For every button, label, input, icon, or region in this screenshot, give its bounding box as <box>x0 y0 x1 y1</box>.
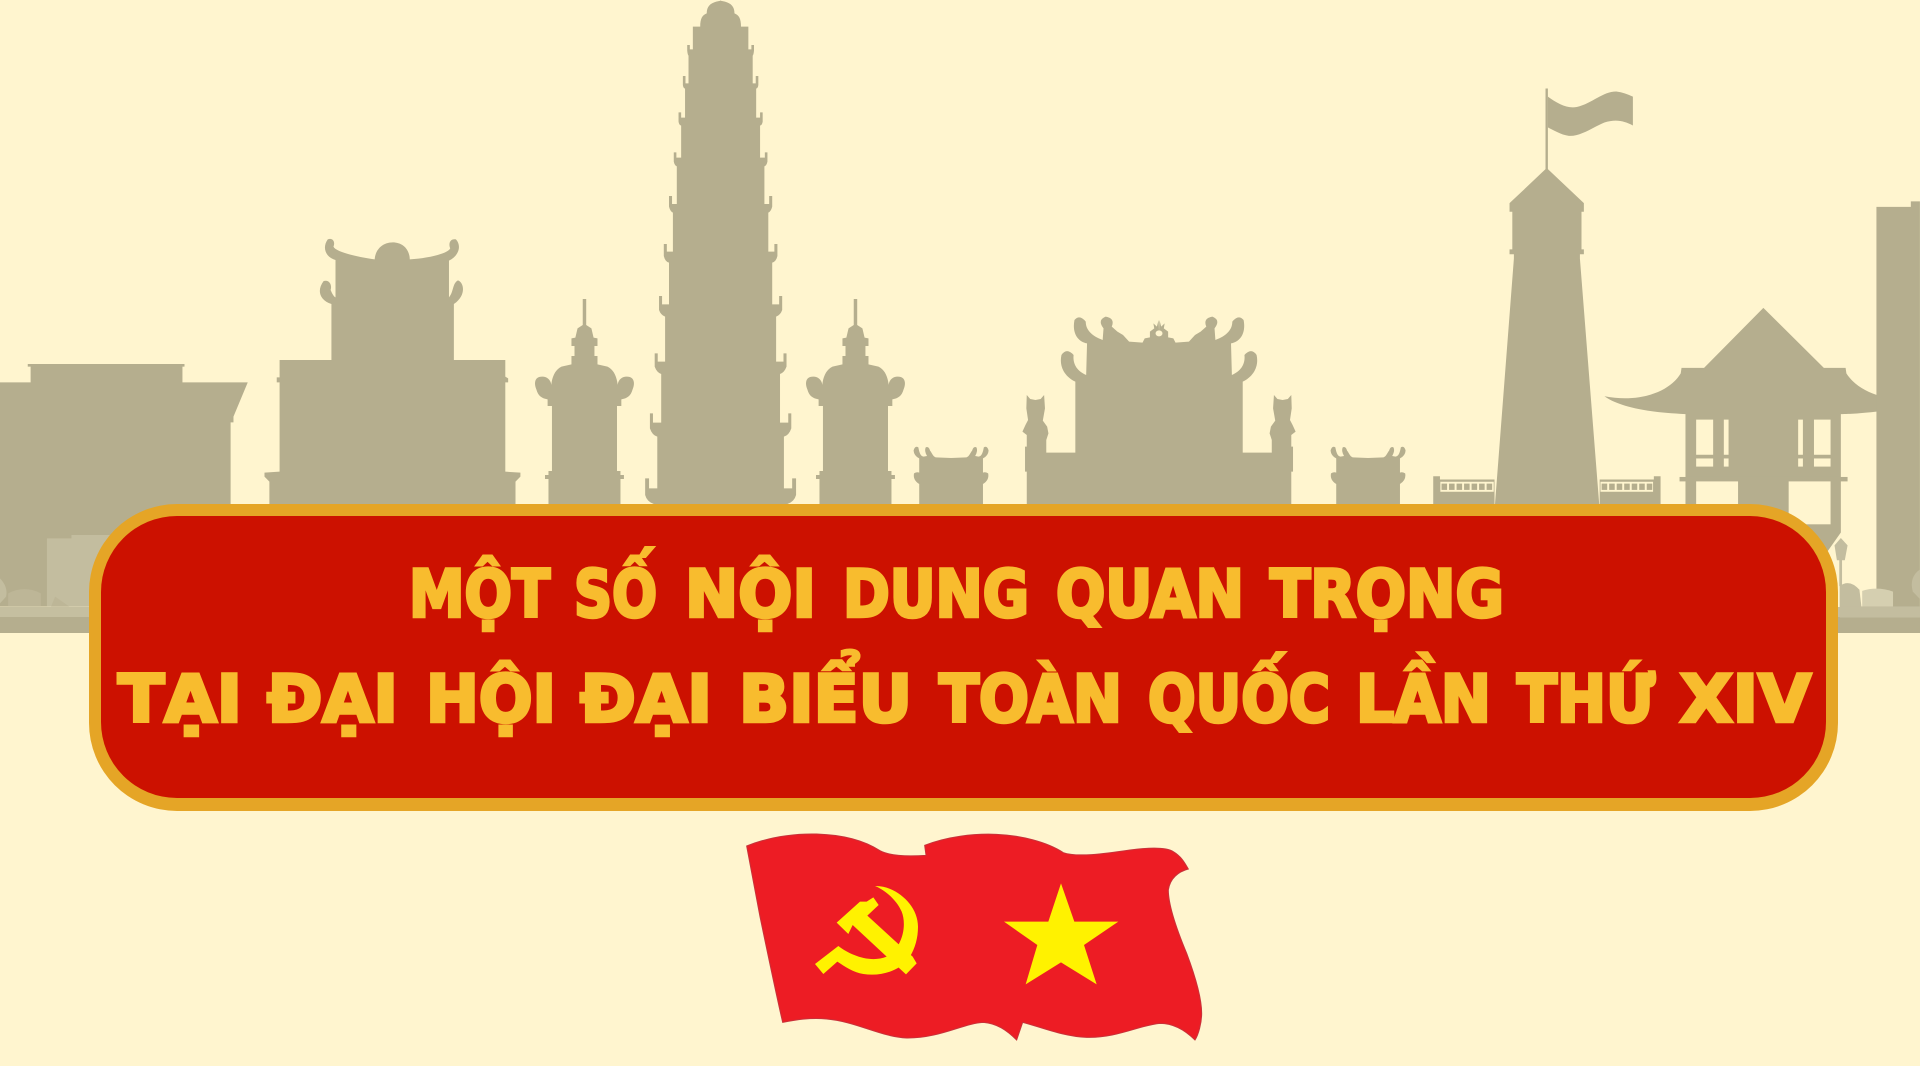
ground strip <box>0 607 1920 633</box>
title line 2: THỨ <box>1517 660 1656 738</box>
building: temple gate <box>264 239 520 510</box>
title line 1: SỐ <box>574 546 657 632</box>
title line 2: ĐẠI <box>267 662 398 738</box>
building: pavilion <box>1604 308 1881 551</box>
title line 2: XIV <box>1680 662 1811 738</box>
title line 1: NỘI <box>685 554 816 632</box>
title line 1: QUAN <box>1056 558 1244 632</box>
building: left office block <box>0 364 248 607</box>
tower: flag tower with balustrades <box>1433 88 1661 510</box>
title line 2: TOÀN <box>939 660 1122 738</box>
title line 1: TRỌNG <box>1270 558 1504 632</box>
icon: waving flag <box>747 834 1202 1040</box>
building: small shrine two <box>1331 447 1406 508</box>
building: right tall block <box>1876 201 1920 610</box>
title line 1 <box>409 546 1504 632</box>
title line 2: LẦN <box>1356 652 1491 738</box>
tower: left stupa <box>535 299 634 508</box>
title line 2: QUỐC <box>1148 652 1330 738</box>
title line 2: ĐẠI <box>580 662 712 738</box>
tower: right stupa <box>806 299 905 508</box>
street details: lamp, tree and car <box>1835 538 1920 618</box>
icon: yellow star <box>1004 883 1118 984</box>
title line 1: DUNG <box>843 558 1029 632</box>
title line 2: TẠI <box>118 662 242 738</box>
building: small shrine one <box>914 447 989 508</box>
building: central temple <box>1022 317 1296 508</box>
skyline silhouette <box>0 1 1920 633</box>
title line 2: BIỂU <box>739 648 912 738</box>
title banner <box>89 504 1838 811</box>
title line 2: HỘI <box>426 660 556 738</box>
title line 1: MỘT <box>409 554 550 632</box>
icon: hammer and sickle <box>815 886 918 975</box>
tower: tall pagoda <box>645 1 796 508</box>
title line 2 <box>118 648 1811 738</box>
